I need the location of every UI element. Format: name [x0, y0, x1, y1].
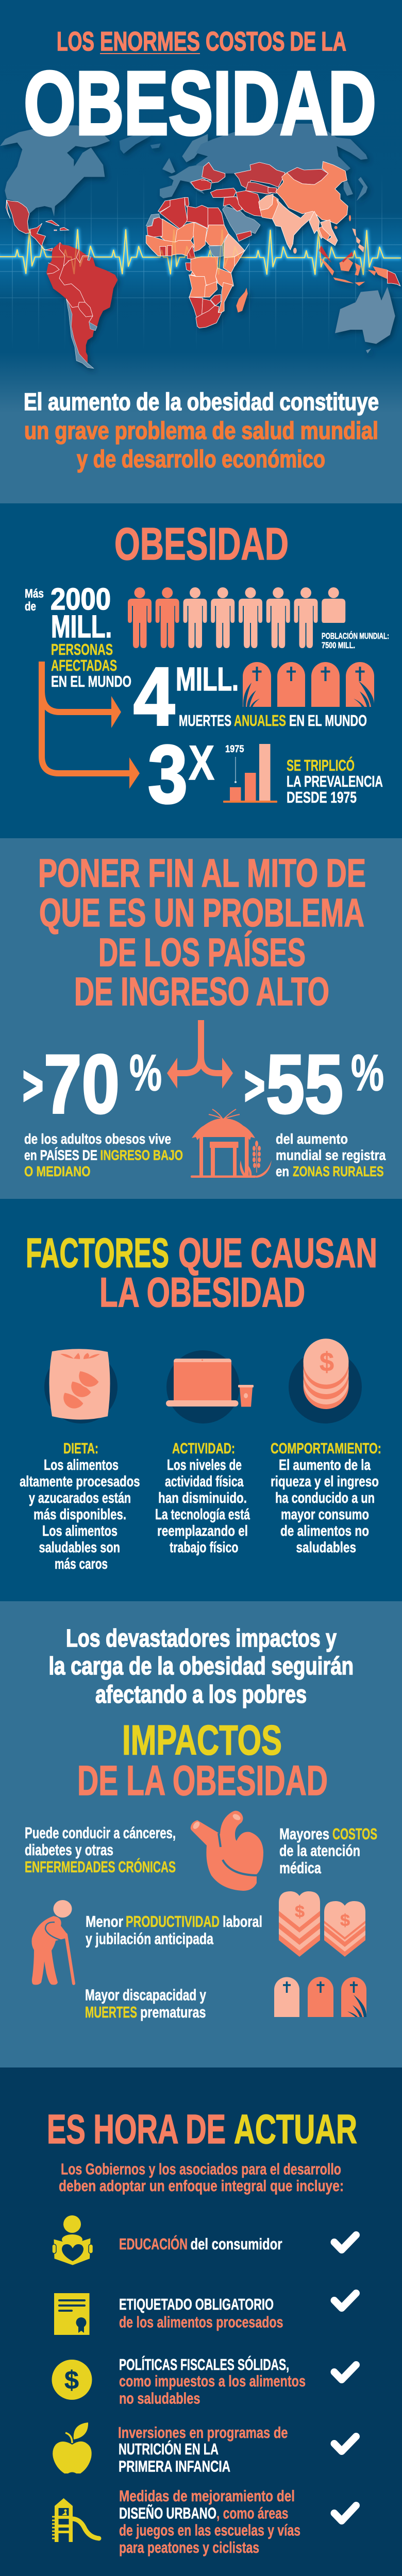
- text: actividad: han disminuido.: [158, 1490, 247, 1506]
- icon: small tombstones: [274, 1977, 366, 2017]
- text: 70 percent detail: de los adultos obesos vive: [24, 1131, 171, 1147]
- stat: 2000 mill personas: de: [25, 600, 36, 614]
- arrow: split arrow: [167, 1020, 233, 1089]
- text: 70 percent detail: en PAÍSES DE: [24, 1147, 97, 1163]
- icon: rural hut: [191, 1109, 272, 1178]
- grey landmass: australia: [335, 287, 395, 353]
- text: actividad: ACTIVIDAD:: [172, 1440, 235, 1457]
- text: dieta: Los alimentos: [44, 1457, 119, 1473]
- text: dieta: [20, 1440, 140, 1572]
- icon: check: [334, 2436, 356, 2451]
- eastern europe: [202, 162, 225, 183]
- icon: check: [334, 2505, 356, 2521]
- heading: factores que causan la obesidad: FACTORES: [26, 1230, 169, 1277]
- text: chronic disease: Puede conducir a cánceres,: [25, 1824, 176, 1842]
- text: políticas fiscales: no saludables: [119, 2389, 200, 2407]
- text: nutrición: [118, 2424, 288, 2475]
- text: chronic disease: ENFERMEDADES CRÓNICAS: [25, 1857, 176, 1876]
- label: world population: [322, 631, 389, 650]
- text: higher costs: COSTOS: [332, 1825, 377, 1843]
- text: nutrición: PRIMERA INFANCIA: [119, 2458, 230, 2475]
- text: productivity: y jubilación anticipada: [86, 1930, 214, 1947]
- text: actividad: reemplazando el: [157, 1523, 248, 1539]
- stat: 70 percent: >: [23, 1056, 43, 1116]
- text: diseño urbano: para peatones y ciclistas: [119, 2538, 259, 2556]
- text: diseño urbano: de juegos en las escuelas y vías: [119, 2521, 300, 2539]
- title: los enormes costos de la: [57, 27, 346, 57]
- south asia: [259, 194, 273, 210]
- text: etiquetado: ETIQUETADO OBLIGATORIO: [119, 2295, 274, 2313]
- icon: heart organ: [191, 1811, 263, 1891]
- stat: 55 percent: [244, 1038, 384, 1131]
- text: dieta: más caros: [55, 1556, 108, 1572]
- stat: 4 mill deaths: MILL.: [176, 660, 239, 698]
- icon: check: [334, 2293, 356, 2308]
- text: se triplicó: [287, 756, 383, 806]
- central america and caribbean: [30, 223, 53, 251]
- text: políticas fiscales: POLÍTICAS FISCALES SÓLIDAS,: [119, 2355, 289, 2374]
- text: actividad: trabajo físico: [170, 1539, 238, 1556]
- text: educación: EDUCACIÓN: [119, 2234, 188, 2253]
- ecg glow: [0, 229, 401, 275]
- ecg line: [0, 229, 401, 275]
- stat: 2000 mill personas: EN EL MUNDO: [51, 672, 131, 690]
- text: dieta: DIETA:: [63, 1440, 98, 1457]
- text: dieta: y azucarados están: [29, 1490, 131, 1506]
- text: dieta: Los alimentos: [42, 1523, 118, 1539]
- stat: 55 percent: 55: [266, 1038, 343, 1131]
- hero subtitle: [24, 388, 379, 472]
- text: disability: Mayor discapacidad y: [85, 1986, 207, 2004]
- stat: 4 mill deaths: MUERTES: [179, 711, 231, 730]
- text: actividad: Los niveles de: [167, 1457, 242, 1473]
- southeast asia: [309, 211, 324, 239]
- title: los enormes costos de la: COSTOS DE LA: [206, 27, 346, 57]
- ecg overlay: [0, 229, 401, 275]
- text: productivity: [86, 1912, 262, 1947]
- text: comportamiento: saludables: [296, 1539, 356, 1556]
- stat: 70 percent: [23, 1038, 162, 1131]
- heading: impactos de la obesidad: [77, 1717, 328, 1804]
- text: higher costs: [279, 1825, 377, 1877]
- stat: 4 mill deaths: ANUALES: [234, 711, 286, 730]
- stat: 55 percent: >: [244, 1056, 265, 1116]
- panel: obesidad stats: [0, 503, 402, 838]
- text: comportamiento: ha conducido a un: [275, 1490, 375, 1506]
- text: diseño urbano: , como áreas: [216, 2504, 289, 2522]
- icon: stacked hearts: $: [340, 1911, 350, 1929]
- stat: 2000 mill personas: [25, 582, 131, 690]
- panel: factors: [0, 1199, 402, 1601]
- heading: es hora de actuar: ES HORA DE: [47, 2106, 226, 2152]
- text: 55 percent detail: en: [276, 1163, 289, 1179]
- text: políticas fiscales: como impuestos a los alimentos: [119, 2372, 306, 2390]
- icon: elderly person: [32, 1900, 74, 1985]
- stat: 70 percent: %: [129, 1044, 162, 1101]
- stat: 2000 mill personas: Más: [25, 587, 44, 601]
- text: productivity: laboral: [223, 1912, 262, 1930]
- chart: prevalence bars: 1975: [225, 743, 244, 755]
- stat: 2000 mill personas: 2000: [51, 582, 111, 616]
- icon: population figures: [128, 587, 345, 648]
- icon: reader: [52, 2215, 93, 2265]
- icon: coin stack: [289, 1338, 362, 1423]
- title: los enormes costos de la: ENORMES: [100, 27, 200, 57]
- africa west: [158, 200, 170, 212]
- text: 55 percent detail: del aumento: [276, 1131, 348, 1147]
- stat: 3x prevalence: 3: [148, 728, 188, 820]
- central asia: [234, 162, 285, 189]
- text: educación: del consumidor: [191, 2235, 282, 2253]
- stat: 4 mill deaths: 4: [133, 650, 175, 742]
- stat: 3x prevalence: X: [189, 736, 214, 790]
- arrow: orange bracket: [42, 662, 140, 789]
- panel: hero: [0, 0, 402, 503]
- heading: poner fin al mito: [38, 851, 366, 1014]
- text: chronic disease: diabetes y otras: [25, 1841, 113, 1859]
- title: los enormes costos de la: LOS: [57, 27, 94, 57]
- panel: call to action: [0, 2067, 402, 2576]
- text: educación: [119, 2234, 282, 2253]
- stat: 70 percent: 70: [44, 1038, 120, 1131]
- world map: [0, 124, 400, 368]
- text: disability: MUERTES: [85, 2003, 137, 2021]
- text: dieta: saludables son: [39, 1539, 120, 1556]
- grey landmass: europe: [182, 134, 208, 162]
- text: nutrición: NUTRICIÓN EN LA: [119, 2439, 219, 2458]
- grey landmass: russia: [196, 124, 367, 174]
- text: productivity: PRODUCTIVIDAD: [126, 1912, 220, 1930]
- text: 70 percent detail: [24, 1131, 183, 1179]
- icon: playground slide: [52, 2498, 99, 2542]
- text: 70 percent detail: INGRESO BAJO: [100, 1147, 183, 1163]
- icon: tombstones: [243, 662, 374, 707]
- text: disability: [85, 1986, 207, 2021]
- heading: obesidad: OBESIDAD: [114, 518, 289, 569]
- text: se triplicó: SE TRIPLICÓ: [287, 756, 355, 774]
- heading: factores que causan la obesidad: LA OBESIDAD: [99, 1269, 305, 1316]
- text: etiquetado: de los alimentos procesados: [119, 2313, 283, 2331]
- text: 55 percent detail: [276, 1131, 386, 1179]
- text: se triplicó: DESDE 1975: [287, 788, 357, 806]
- middle east and iran: [210, 188, 236, 197]
- hero subtitle: y de desarrollo económico: [77, 445, 325, 472]
- grey landmass: arabia: [223, 206, 260, 234]
- stat: 2000 mill personas: PERSONAS: [51, 640, 113, 658]
- label: world population: 7500 MILL.: [322, 640, 355, 650]
- mongolia: [287, 167, 328, 184]
- text: comportamiento: [271, 1440, 381, 1556]
- heading: factores que causan la obesidad: [26, 1230, 377, 1316]
- text: actividad: La tecnología está: [155, 1506, 250, 1523]
- icon: laptop and coffee: [166, 1350, 254, 1423]
- stat: 55 percent: %: [351, 1044, 384, 1101]
- text: chronic disease: [25, 1824, 176, 1876]
- text: políticas fiscales: [119, 2355, 306, 2407]
- text: diseño urbano: [119, 2487, 300, 2556]
- intro text: afectando a los pobres: [95, 1681, 307, 1708]
- text: productivity: Menor: [86, 1912, 123, 1930]
- text: nutrición: Inversiones en programas de: [118, 2424, 288, 2442]
- text: actividad: actividad física: [165, 1473, 244, 1490]
- stat: 2000 mill personas: MILL.: [51, 609, 112, 644]
- text: comportamiento: mayor consumo: [281, 1506, 369, 1523]
- grey landmass: north america: [0, 125, 110, 216]
- stat: 2000 mill personas: AFECTADAS: [51, 656, 117, 674]
- text: disability: prematuras: [140, 2003, 206, 2021]
- icon: dollar coin: [52, 2360, 92, 2400]
- text: higher costs: Mayores: [279, 1825, 329, 1843]
- north africa: [187, 205, 208, 228]
- stat: 4 mill deaths: [133, 650, 367, 742]
- icon: stacked hearts: $: [295, 1902, 305, 1921]
- south america: [46, 242, 118, 362]
- text: comportamiento: El aumento de la: [279, 1457, 371, 1473]
- heading: impactos de la obesidad: IMPACTOS: [122, 1717, 282, 1764]
- icon: coin stack: $: [320, 1347, 334, 1377]
- icon: snack bag: [44, 1349, 118, 1423]
- intro text: [59, 2160, 344, 2195]
- icon: certificate: [54, 2293, 90, 2335]
- icon: stacked hearts: [279, 1891, 365, 1957]
- intro text: [48, 1625, 354, 1708]
- stat: 3x prevalence: [148, 728, 214, 820]
- text: 70 percent detail: O MEDIANO: [24, 1163, 91, 1179]
- panel: myth: [0, 838, 402, 1199]
- text: dieta: más disponibles.: [34, 1506, 126, 1523]
- icon: dollar coin: $: [64, 2366, 79, 2395]
- stat: 4 mill deaths: EN EL MUNDO: [289, 711, 367, 730]
- text: actividad: [155, 1440, 250, 1556]
- icon: check: [334, 2365, 356, 2380]
- panel: impacts: [0, 1601, 402, 2067]
- text: dieta: altamente procesados: [20, 1473, 140, 1490]
- mexico: [6, 200, 30, 233]
- icon: apple: [53, 2422, 92, 2473]
- text: etiquetado: [119, 2295, 283, 2331]
- text: diseño urbano: DISEÑO URBANO: [119, 2504, 216, 2522]
- text: diseño urbano: Medidas de mejoramiento del: [119, 2487, 295, 2505]
- east and central africa: [205, 225, 228, 246]
- icon: check: [334, 2235, 356, 2250]
- heading: poner fin al mito: DE LOS PAÍSES: [98, 930, 306, 975]
- china: [276, 161, 348, 224]
- chart: prevalence bars: [223, 743, 277, 803]
- text: comportamiento: de alimentos no: [280, 1523, 369, 1539]
- text: higher costs: médica: [279, 1859, 322, 1877]
- text: higher costs: de la atención: [279, 1841, 360, 1860]
